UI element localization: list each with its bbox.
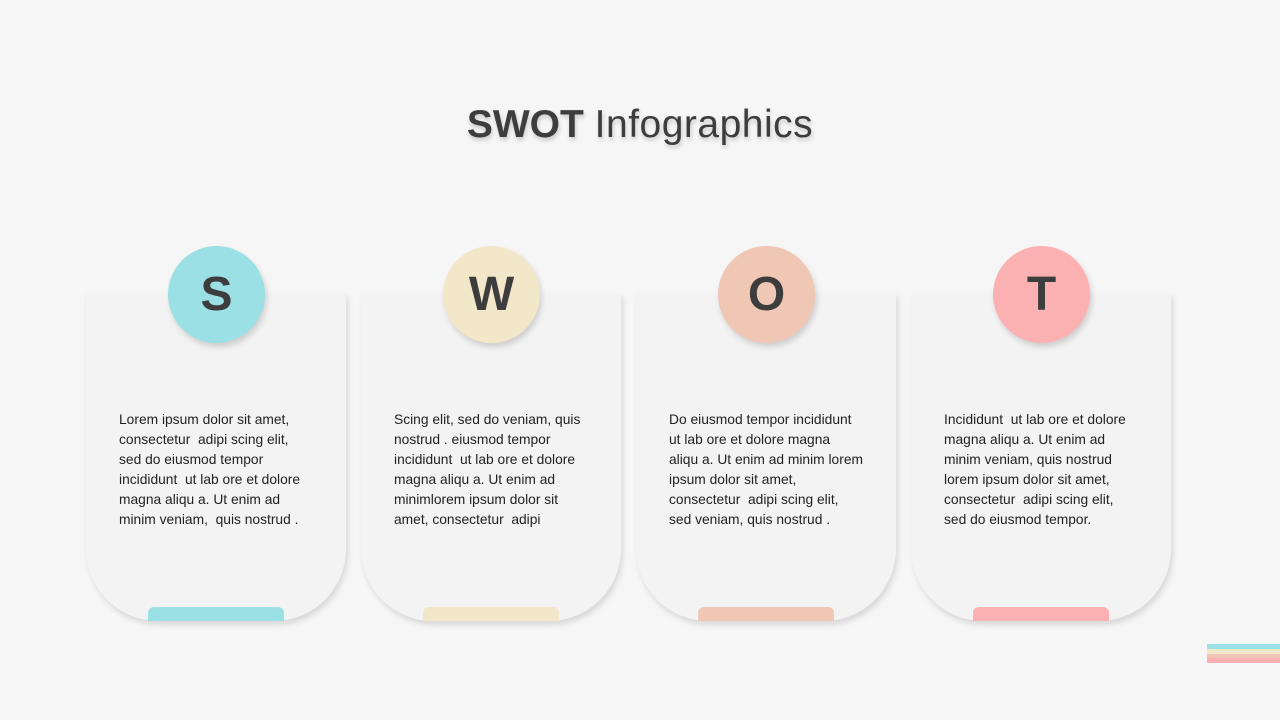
text: opportunities: ut lab ore et dolore magna — [669, 432, 830, 447]
text: strengths: minim veniam, quis nostrud . — [119, 512, 298, 527]
text: opportunities: ipsum dolor sit amet, — [669, 472, 796, 487]
text: opportunities: aliqu a. Ut enim ad minim lorem — [669, 452, 863, 467]
text: strengths: sed do eiusmod tempor — [119, 452, 263, 467]
text: threats — [944, 412, 1126, 527]
text: weaknesses: amet, consectetur adipi — [394, 512, 540, 527]
text: weaknesses: magna aliqu a. Ut enim ad — [394, 472, 555, 487]
icon: S circle — [168, 246, 265, 343]
icon: W circle — [443, 246, 540, 343]
icon: T circle — [993, 246, 1090, 343]
decoration: color stripes — [1207, 644, 1280, 663]
panel: opportunities — [636, 293, 896, 621]
text: strengths: magna aliqu a. Ut enim ad — [119, 492, 280, 507]
text: opportunities: consectetur adipi scing elit, — [669, 492, 838, 507]
text: threats: minim veniam, quis nostrud — [944, 452, 1112, 467]
text: threats: magna aliqu a. Ut enim ad — [944, 432, 1105, 447]
text: threats: Incididunt ut lab ore et dolore — [944, 412, 1126, 427]
text: strengths — [119, 412, 300, 527]
text: weaknesses — [394, 412, 580, 527]
text: opportunities: sed veniam, quis nostrud . — [669, 512, 830, 527]
title: SWOT Infographics — [467, 103, 813, 146]
text: threats: consectetur adipi scing elit, — [944, 492, 1113, 507]
text: strengths: consectetur adipi scing elit, — [119, 432, 288, 447]
text: weaknesses: minimlorem ipsum dolor sit — [394, 492, 558, 507]
panel: threats — [911, 293, 1171, 621]
panel: strengths — [86, 293, 346, 621]
text: strengths: Lorem ipsum dolor sit amet, — [119, 412, 289, 427]
text: opportunities: Do eiusmod tempor incididunt — [669, 412, 852, 427]
icon: T circle: T — [1027, 268, 1056, 321]
icon: O circle: O — [748, 268, 785, 321]
text: strengths: incididunt ut lab ore et dolore — [119, 472, 300, 487]
tab — [423, 607, 559, 621]
text: threats: sed do eiusmod tempor. — [944, 512, 1091, 527]
tab — [148, 607, 284, 621]
text: opportunities — [669, 412, 863, 527]
icon: S circle: S — [200, 268, 232, 321]
panel: weaknesses — [361, 293, 621, 621]
icon: W circle: W — [469, 268, 514, 321]
text: weaknesses: Scing elit, sed do veniam, quis — [394, 412, 580, 427]
text: threats: lorem ipsum dolor sit amet, — [944, 472, 1110, 487]
tab — [698, 607, 834, 621]
tab — [973, 607, 1109, 621]
text: weaknesses: nostrud . eiusmod tempor — [394, 432, 550, 447]
text: weaknesses: incididunt ut lab ore et dolore — [394, 452, 575, 467]
icon: O circle — [718, 246, 815, 343]
